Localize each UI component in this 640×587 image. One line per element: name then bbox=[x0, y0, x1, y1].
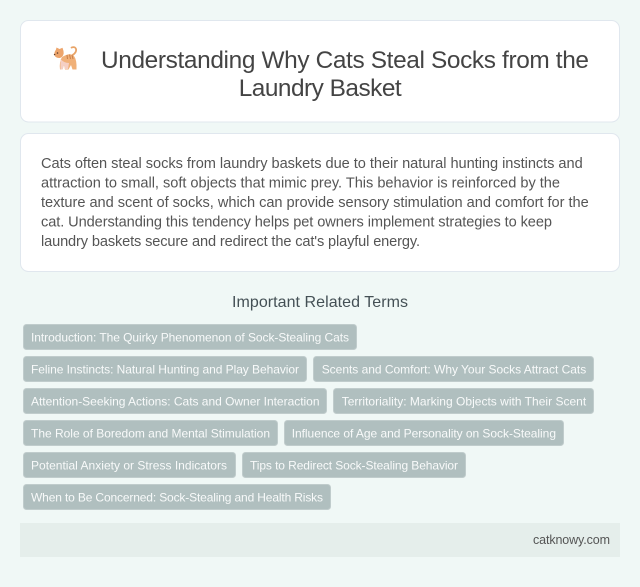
summary paragraph: cat. Understanding this tendency helps pet owners implement strategies to keep bbox=[41, 214, 552, 230]
summary paragraph: attraction to small, soft objects that mimic prey. This behavior is reinforced by the bbox=[41, 176, 560, 192]
tag: territoriality bbox=[334, 388, 594, 414]
summary paragraph: Cats often steal socks from laundry baskets due to their natural hunting instincts and bbox=[41, 156, 583, 172]
title text: Understanding Why Cats Steal Socks from the bbox=[101, 47, 589, 74]
tag: attention seeking bbox=[24, 388, 326, 414]
summary paragraph: laundry baskets secure and redirect the cat's playful energy. bbox=[41, 234, 420, 250]
panel: title card bbox=[20, 20, 620, 122]
tag: introduction: Introduction: The Quirky Phenomenon of Sock-Stealing Cats bbox=[31, 330, 349, 344]
tag: health risks: When to Be Concerned: Sock-Stealing and Health Risks bbox=[31, 490, 323, 504]
footer site name: catknowy.com bbox=[533, 533, 610, 547]
tag: age and personality: Influence of Age and Personality on Sock-Stealing bbox=[292, 426, 556, 440]
tag: anxiety: Potential Anxiety or Stress Indicators bbox=[31, 458, 227, 472]
summary paragraph: texture and scent of socks, which can provide sensory stimulation and comfort for the bbox=[41, 195, 589, 211]
tag: attention seeking: Attention-Seeking Actions: Cats and Owner Interaction bbox=[31, 394, 320, 408]
related terms tags bbox=[24, 324, 594, 510]
icon: cat bbox=[54, 47, 77, 70]
tag: feline instincts: Feline Instincts: Natural Hunting and Play Behavior bbox=[31, 362, 299, 376]
tag: scents and comfort bbox=[314, 356, 594, 382]
tag: redirect tips: Tips to Redirect Sock-Stealing Behavior bbox=[250, 458, 458, 472]
tag: boredom: The Role of Boredom and Mental Stimulation bbox=[31, 426, 270, 440]
tag: scents and comfort: Scents and Comfort: Why Your Socks Attract Cats bbox=[322, 362, 586, 376]
footer bbox=[20, 523, 620, 557]
tag: introduction bbox=[24, 324, 356, 350]
title text bbox=[101, 47, 589, 102]
tag: age and personality bbox=[284, 420, 564, 446]
panel: summary card bbox=[20, 134, 620, 272]
tag: territoriality: Territoriality: Marking Objects with Their Scent bbox=[342, 394, 587, 408]
tag: feline instincts bbox=[24, 356, 306, 382]
summary paragraph bbox=[41, 156, 589, 250]
tag: anxiety bbox=[24, 452, 236, 478]
heading: related terms: Important Related Terms bbox=[232, 294, 408, 311]
tag: health risks bbox=[24, 484, 330, 510]
title text: Laundry Basket bbox=[239, 75, 402, 102]
tag: redirect tips bbox=[242, 452, 466, 478]
tag: boredom bbox=[24, 420, 278, 446]
